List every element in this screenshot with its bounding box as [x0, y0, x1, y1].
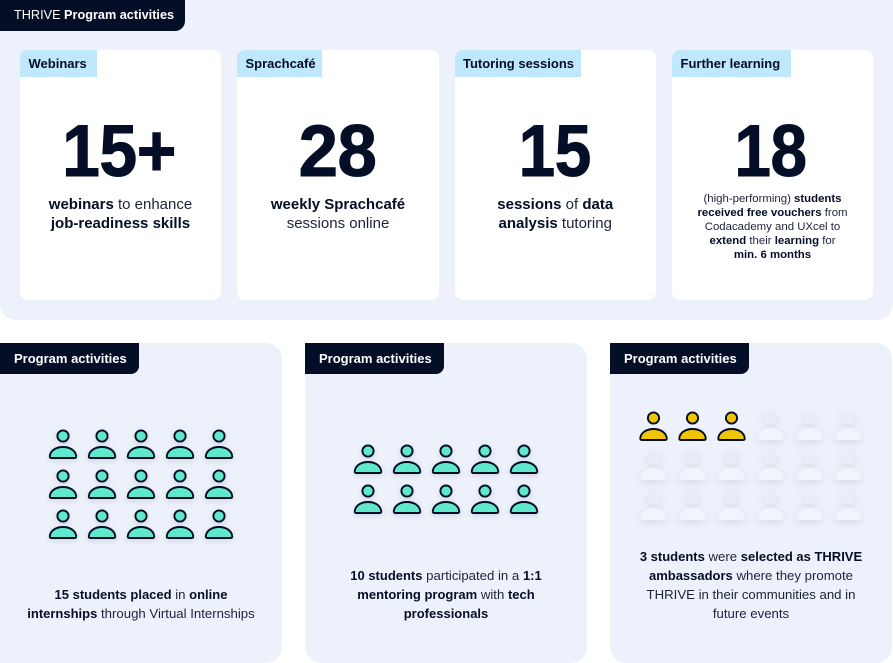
text: tutoring description: analysis tutoring: [499, 215, 612, 232]
heading tab: [0, 343, 139, 374]
text: mentoring description: mentoring program with tech: [357, 587, 535, 602]
text: ambassadors description: future events: [713, 606, 789, 621]
card: tutoring sessions: [454, 50, 656, 300]
text: ambassadors description: ambassadors where they promote: [649, 568, 853, 583]
stat: 15: 15: [518, 111, 590, 192]
pictogram: 10 students: [355, 445, 537, 513]
tag: tutoring sessions: Tutoring sessions: [463, 56, 574, 71]
text: ambassadors description: 3 students were selected as THRIVE: [640, 549, 862, 564]
highlighted students: [640, 412, 745, 440]
panel: mentoring: [305, 343, 587, 663]
heading tab: Program activities: [624, 351, 737, 366]
heading tab: Program activities: [319, 351, 432, 366]
heading tab: THRIVE Program activities: [14, 8, 174, 22]
pictogram: 3 of 18 students: [640, 412, 862, 520]
stat: 28: 28: [299, 111, 376, 192]
faded students: [640, 412, 862, 520]
panel: ambassadors: [610, 343, 892, 663]
tag: webinars: Webinars: [28, 56, 87, 71]
text: tutoring description: [497, 196, 614, 232]
text: tutoring description: sessions of data: [497, 196, 613, 213]
heading tab: [0, 0, 185, 31]
text: sprachcafe description: sessions online: [287, 215, 389, 232]
tag: sprachcafe: [237, 50, 322, 77]
stat: 18: 18: [734, 111, 807, 192]
text: webinars description: webinars to enhance: [49, 196, 192, 213]
text: sprachcafe description: [270, 196, 405, 232]
panel: THRIVE Program activities: [0, 0, 893, 320]
text: mentoring description: professionals: [404, 606, 488, 621]
text: further learning description: Codacademy and UXcel to: [705, 221, 840, 233]
card: sprachcafe: [237, 50, 439, 300]
text: ambassadors description: THRIVE in their communities and in: [647, 587, 855, 602]
tag: tutoring sessions: [454, 50, 580, 77]
stat: 15+: 15+: [62, 111, 176, 192]
text: sprachcafe description: weekly Sprachcafé: [271, 196, 405, 213]
text: further learning description: (high-performing) students: [704, 193, 842, 205]
heading tab: [610, 343, 749, 374]
text: further learning description: min. 6 months: [734, 249, 811, 261]
card: webinars: [20, 50, 221, 300]
text: internships description: 15 students placed in online: [55, 587, 227, 602]
tag: further learning: Further learning: [680, 56, 780, 71]
tag: further learning: [672, 50, 791, 77]
tag: sprachcafe: Sprachcafé: [246, 56, 316, 71]
panel: internships: [0, 343, 282, 663]
text: further learning description: received free vouchers from: [697, 207, 848, 219]
text: internships description: [27, 587, 255, 621]
text: further learning description: extend their learning for: [710, 235, 836, 247]
heading tab: [305, 343, 444, 374]
text: internships description: internships through Virtual Internships: [27, 606, 255, 621]
pictogram: 15 students: [50, 430, 232, 538]
text: webinars description: job-readiness skills: [51, 215, 190, 232]
text: ambassadors description: [640, 549, 862, 621]
tag: webinars: [20, 50, 97, 77]
heading tab: Program activities: [14, 351, 127, 366]
text: mentoring description: [350, 568, 542, 621]
text: webinars description: [48, 196, 192, 232]
text: further learning description: [697, 193, 848, 261]
card: further learning: [672, 50, 873, 300]
text: mentoring description: 10 students participated in a 1:1: [350, 568, 542, 583]
